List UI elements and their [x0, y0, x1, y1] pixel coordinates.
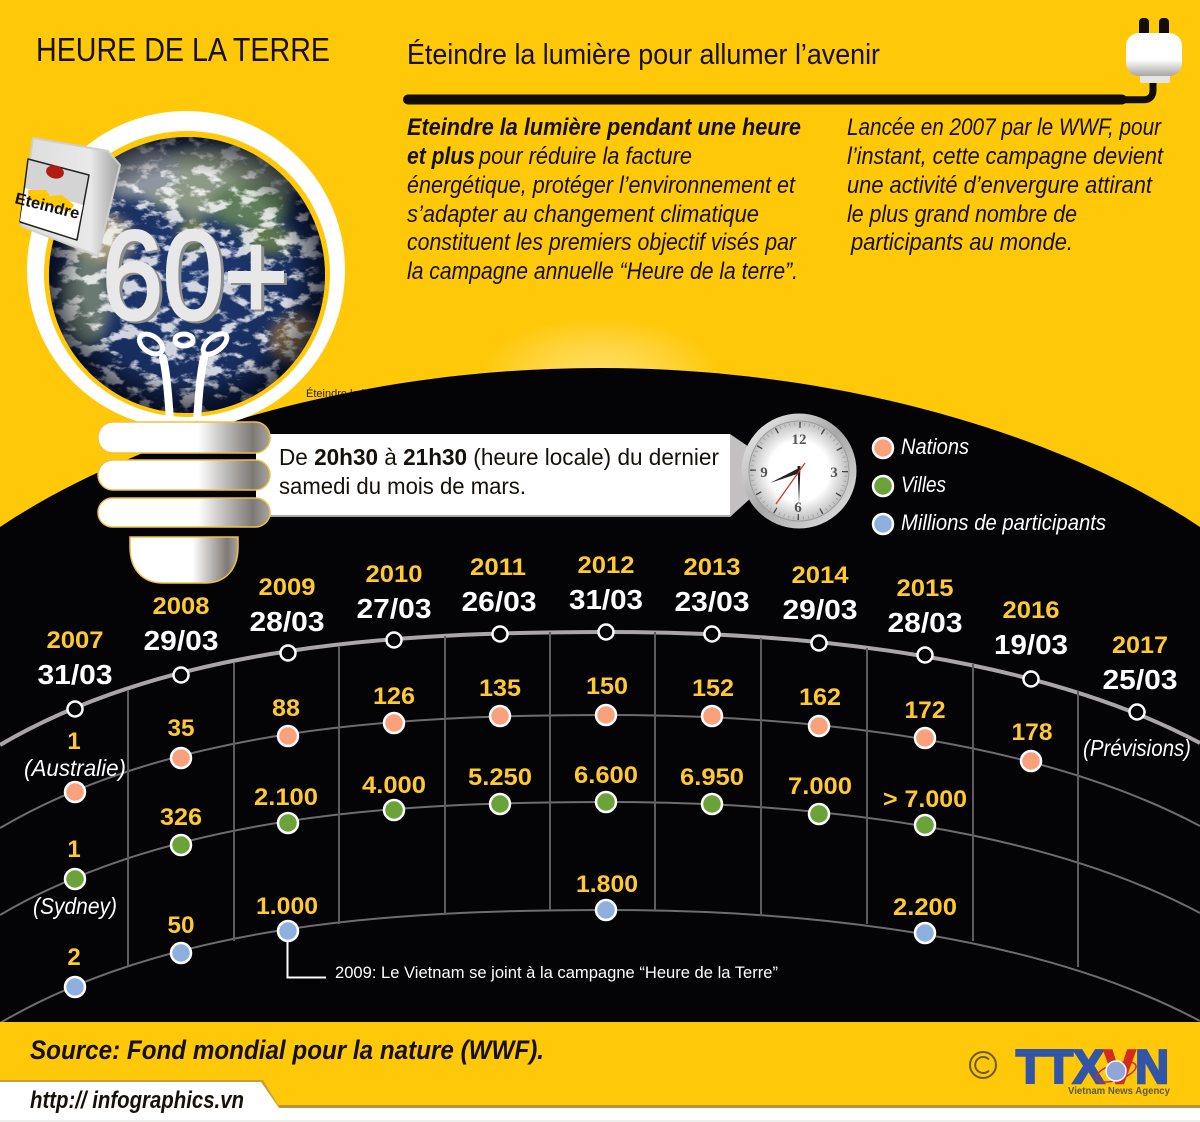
text block: left paragraph	[407, 114, 801, 285]
date labels	[38, 584, 1178, 695]
nations series: 135	[479, 675, 521, 702]
icon: clock: 6	[794, 500, 802, 516]
number 60+: 60+	[105, 207, 291, 348]
year labels: 2014	[792, 562, 849, 589]
info callout box: samedi du mois de mars.	[279, 473, 526, 499]
text block: right paragraph	[847, 114, 1164, 256]
stray small label behind dome: Éteindre la lumière	[306, 387, 398, 400]
switch label: Eteindre	[13, 190, 81, 223]
footer band	[0, 1022, 1200, 1122]
glow above the dome	[480, 317, 720, 427]
date labels: 29/03	[144, 625, 218, 656]
text block: right paragraph: participants au monde.	[850, 229, 1073, 256]
date labels: 27/03	[356, 593, 432, 624]
legend: Millions de participants	[901, 510, 1106, 535]
participants series: 2.200	[893, 894, 957, 921]
text block: left paragraph: énergétique, protéger l’environnement et	[407, 172, 796, 199]
cities series: 1	[67, 836, 81, 863]
date labels: 31/03	[38, 659, 112, 690]
clock hands	[770, 468, 800, 483]
logo: TTXVN: TTXVN	[1016, 1040, 1169, 1093]
participants series: 50	[168, 912, 194, 939]
year labels: 2013	[684, 554, 740, 581]
callout: Vietnam 2009: 2009: Le Vietnam se joint à la campagne “Heure de la Terre”	[335, 963, 778, 982]
participants series: 2	[67, 944, 81, 971]
callout text: De 20h30 à 21h30 (heure locale) du dernier	[279, 444, 719, 470]
year labels: 2007	[46, 627, 104, 654]
year labels: 2012	[578, 552, 634, 579]
cities line	[0, 802, 1200, 915]
text block: right paragraph: une activité d’envergure attirant	[847, 172, 1153, 199]
date markers	[68, 624, 1144, 720]
cities series: 326	[160, 804, 202, 831]
cities series: 7.000	[788, 773, 852, 800]
note: Australie: (Australie)	[24, 755, 126, 781]
year labels: 2009	[258, 574, 316, 601]
icon: plug and cable	[408, 18, 1182, 100]
year labels: 2008	[152, 593, 210, 620]
subtitle: Éteindre la lumière pour allumer l’avenir	[407, 38, 880, 71]
nations series: 1	[67, 728, 81, 755]
text block: left paragraph: pour réduire la facture	[478, 143, 692, 170]
participants series: 1.800	[576, 871, 638, 898]
filament	[136, 330, 230, 420]
date labels: 28/03	[888, 607, 962, 638]
nations series: 35	[168, 715, 194, 742]
nations series: 152	[692, 675, 734, 702]
bulb inner yellow ring	[44, 131, 330, 417]
vertical separators	[128, 632, 1078, 967]
year labels	[46, 552, 1168, 659]
cities series: 4.000	[362, 772, 426, 799]
nations series: 172	[904, 697, 946, 724]
text block: right paragraph: Lancée en 2007 par le WWF, pour	[847, 114, 1162, 141]
number 60+: 60+	[102, 205, 288, 346]
text block: left paragraph: constituent les premiers objectif visés par	[407, 229, 797, 256]
participants series: 1.000	[256, 893, 318, 920]
title: HEURE DE LA TERRE	[36, 31, 330, 68]
cities series: > 7.000	[883, 786, 967, 813]
date labels: 29/03	[782, 594, 858, 625]
text block: left paragraph: Eteindre la lumière pendant une heure	[407, 114, 801, 141]
legend: Villes	[901, 472, 946, 497]
website url: http:// infographics.vn	[30, 1087, 244, 1114]
legend	[873, 434, 1106, 535]
icon: switch	[13, 138, 120, 256]
text block: right paragraph: le plus grand nombre de	[847, 201, 1077, 228]
year labels: 2011	[470, 554, 526, 581]
clock numerals: 12	[792, 432, 806, 448]
icon: clock	[742, 414, 856, 528]
cities series: 6.600	[574, 762, 638, 789]
participants line	[0, 910, 1200, 1023]
source text: Source: Fond mondial pour la nature (WWF).	[30, 1035, 544, 1065]
nations series: 126	[373, 683, 415, 710]
year labels: 2015	[896, 575, 954, 602]
icon: clock: 3	[830, 465, 838, 481]
date labels: 23/03	[674, 586, 750, 617]
text block: left paragraph: la campagne annuelle “Heure de la terre”.	[407, 258, 798, 285]
nations series: 88	[272, 695, 300, 722]
cities series: 2.100	[254, 784, 318, 811]
info callout box	[256, 434, 752, 517]
participants series	[65, 871, 957, 997]
nations line	[0, 715, 1200, 828]
nations series: 178	[1012, 719, 1052, 746]
light bulb	[27, 111, 345, 429]
year labels: 2010	[366, 561, 422, 588]
logo: TTXVN: Vietnam News Agency	[1068, 1086, 1170, 1097]
text block: left paragraph: et plus	[407, 143, 475, 170]
copyright mark	[970, 1052, 996, 1078]
bulb glass ring	[27, 111, 345, 429]
cities series: 5.250	[468, 764, 532, 791]
nations series	[65, 673, 1052, 802]
year labels: 2017	[1112, 632, 1168, 659]
main date arc	[0, 632, 1200, 745]
date labels: 25/03	[1102, 664, 1178, 695]
cities series: 6.950	[680, 764, 744, 791]
legend: Nations	[901, 434, 969, 459]
callout arrow	[730, 434, 752, 517]
text block: right paragraph: l’instant, cette campagne devient	[847, 143, 1164, 170]
date labels: 31/03	[569, 584, 643, 615]
nations series: 162	[799, 684, 841, 711]
date labels: 28/03	[250, 606, 324, 637]
timeline grid	[0, 632, 1200, 1023]
callout: Vietnam 2009	[288, 941, 778, 982]
note: Sydney: (Sydney)	[33, 893, 117, 919]
text block: left paragraph: s’adapter au changement climatique	[407, 201, 759, 228]
icon: clock: 9	[760, 465, 768, 481]
year labels: 2016	[1002, 597, 1060, 624]
lamp base	[98, 422, 270, 583]
date labels: 19/03	[994, 629, 1068, 660]
cities series	[65, 762, 967, 889]
nations series: 150	[586, 673, 628, 700]
globe	[45, 133, 330, 418]
date labels: 26/03	[462, 586, 536, 617]
black dome	[0, 368, 1200, 1030]
